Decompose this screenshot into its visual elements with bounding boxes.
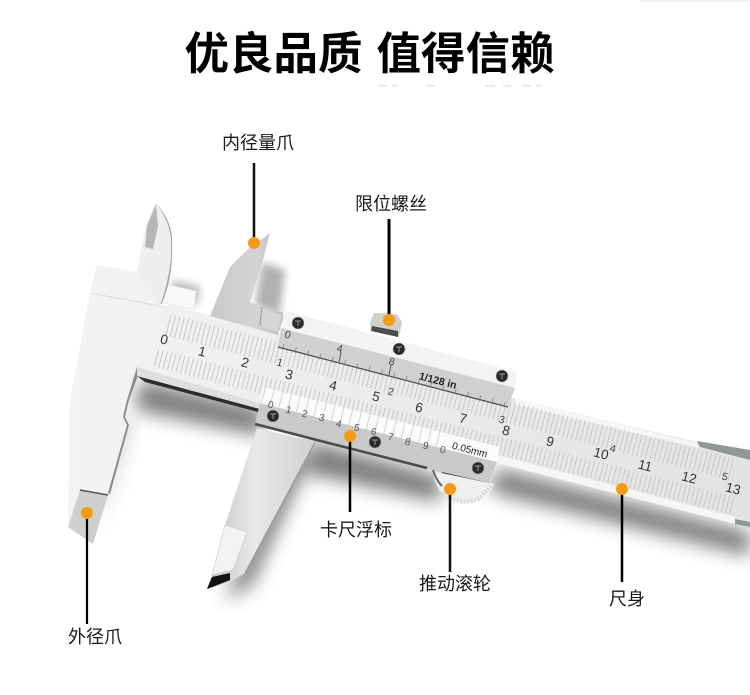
upper inch slider — [278, 310, 517, 407]
callout: stop screw: 限位螺丝 — [355, 194, 427, 214]
main scale numbers: 4 — [328, 377, 339, 394]
moving inner jaw — [210, 233, 285, 335]
upper inch slider: 8 — [387, 356, 396, 369]
vernier caliper illustration — [68, 203, 750, 600]
main scale numbers: 10 — [592, 445, 610, 463]
main scale numbers: 2 — [240, 354, 251, 371]
main scale numbers: 0 — [159, 331, 170, 348]
callout: inner jaw — [222, 133, 294, 249]
title: 值得信赖 — [376, 30, 555, 79]
lower vernier slider — [255, 387, 500, 484]
main beam and outer jaw body — [68, 265, 750, 544]
callout: stop screw — [355, 194, 427, 326]
callout: ruler body: 尺身 — [609, 589, 645, 609]
drop shadows — [100, 262, 750, 600]
outer jaw inner edge shading — [108, 367, 262, 494]
main scale numbers: 3 — [284, 366, 295, 383]
callout: thumb wheel: 推动滚轮 — [419, 574, 491, 594]
callout: outer jaw — [68, 507, 122, 647]
main scale numbers: 6 — [414, 399, 425, 416]
lower vernier slider: 0 — [267, 400, 275, 412]
beam highlight edges — [515, 398, 699, 448]
main scale numbers: 1 — [275, 357, 284, 370]
main scale numbers: 3 — [497, 414, 506, 427]
thumb wheel — [433, 470, 494, 504]
upper inch slider: 0 — [283, 329, 292, 342]
main scale numbers: 1 — [197, 343, 208, 360]
main scale numbers: 7 — [458, 410, 469, 427]
faint subtitle remnants — [378, 85, 542, 86]
beam dark lower end — [735, 519, 750, 527]
main scale numbers: 5 — [371, 388, 382, 405]
top edge strip — [640, 0, 750, 2]
main scale numbers: 11 — [636, 457, 654, 475]
lower vernier slider: 4 — [335, 419, 343, 431]
lower vernier slider: 0.05mm — [451, 441, 488, 460]
callout: inner jaw: 内径量爪 — [222, 133, 294, 153]
title: 优良品质 — [184, 30, 363, 79]
main scale numbers: 12 — [680, 469, 698, 487]
fixed inner jaw — [130, 203, 172, 305]
lower vernier slider: 7 — [387, 432, 395, 444]
upper inch slider: 4 — [335, 343, 344, 356]
lower vernier slider: 3 — [318, 413, 326, 425]
lower vernier slider: 9 — [422, 441, 430, 453]
slider screws — [267, 317, 508, 474]
main scale numbers: 4 — [608, 443, 617, 456]
outer jaw crease — [90, 293, 160, 306]
main scale numbers: 8 — [501, 422, 512, 439]
callout: vernier: 卡尺浮标 — [320, 520, 392, 540]
lower vernier slider: 5 — [353, 423, 361, 435]
outer jaw tip plate — [68, 490, 108, 544]
main scale tick marks — [156, 325, 735, 506]
lower vernier slider: 1 — [285, 405, 293, 417]
lower vernier slider: 0 — [439, 445, 447, 457]
main scale numbers — [159, 331, 742, 498]
callout: vernier — [320, 430, 392, 540]
lower vernier slider: 8 — [404, 437, 412, 449]
title — [184, 30, 555, 79]
main scale numbers: 13 — [724, 480, 742, 498]
main scale numbers: 9 — [545, 433, 556, 450]
beam dark upper strip at right end — [697, 441, 750, 460]
fixed inner jaw backing block — [164, 284, 196, 310]
callout: outer jaw: 外径爪 — [68, 627, 122, 647]
upper inch slider: 1/128 in — [418, 370, 458, 392]
moving outer jaw — [207, 428, 315, 589]
callout: thumb wheel — [419, 483, 491, 594]
main scale numbers: 5 — [720, 471, 729, 484]
callout: ruler body — [609, 483, 645, 609]
lower vernier slider: 2 — [301, 409, 309, 421]
lower vernier slider: 6 — [370, 427, 378, 439]
stop screw — [370, 313, 402, 337]
main scale numbers: 2 — [386, 386, 395, 399]
